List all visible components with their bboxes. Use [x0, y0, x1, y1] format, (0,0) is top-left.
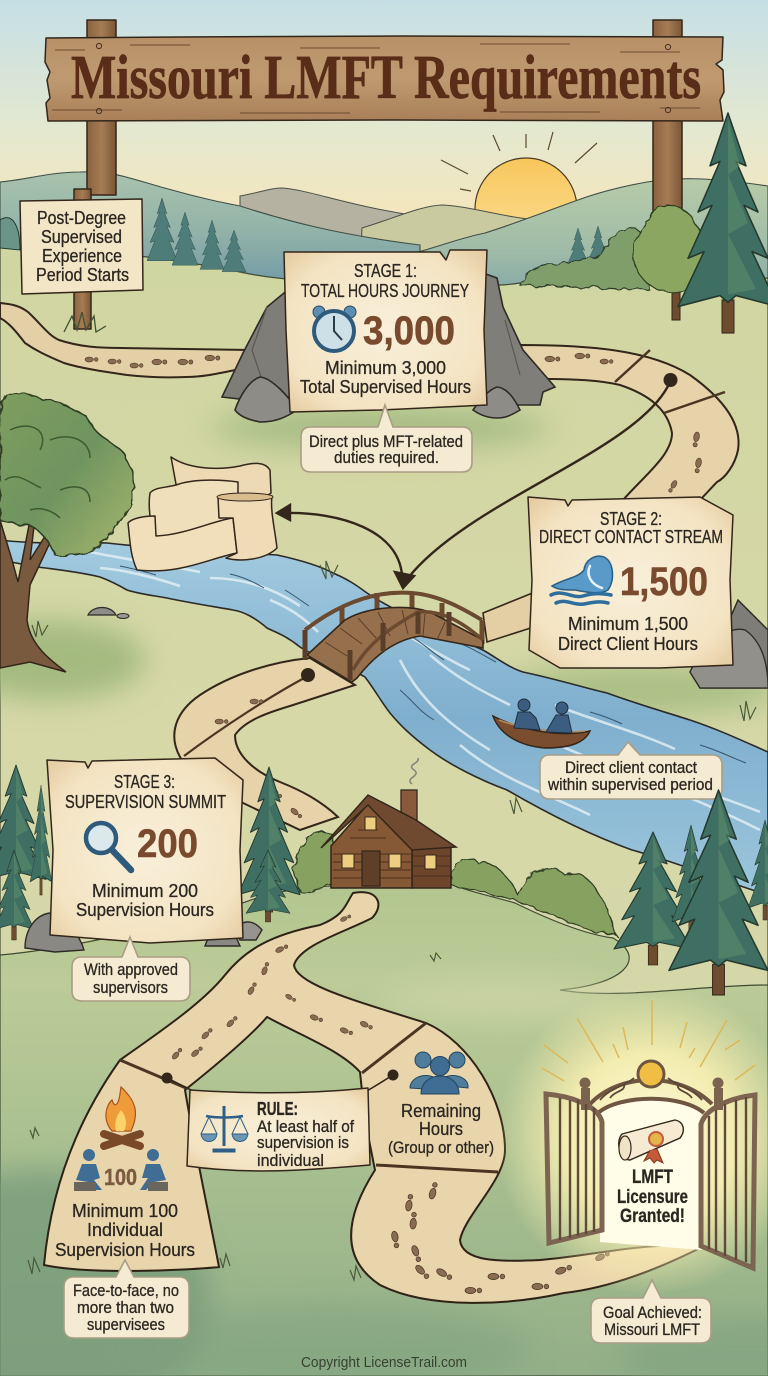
river	[0, 540, 768, 895]
start sign	[20, 199, 143, 294]
callout: stage 3 note: With approved	[84, 960, 178, 979]
panel: stage 2: Direct Client Hours	[558, 633, 698, 654]
icon: wave	[551, 556, 613, 604]
start sign: Experience	[42, 245, 122, 266]
left large tree	[0, 394, 134, 672]
large pine right	[678, 113, 768, 333]
text: remaining hours: Remaining	[401, 1100, 481, 1121]
arrow: stage 1 trail to bridge	[408, 373, 678, 578]
small rock near river	[88, 607, 129, 618]
text: individual hours: Supervision Hours	[55, 1239, 195, 1260]
right bushes and distant pines	[520, 226, 650, 290]
callout: face-to-face note: Face-to-face, no	[73, 1281, 179, 1300]
grass tufts	[28, 561, 756, 1280]
lower field on the hillside	[0, 884, 768, 1376]
panel: stage 3: Supervision Hours	[76, 899, 214, 920]
text: remaining hours: (Group or other)	[388, 1138, 494, 1157]
start sign: Post-Degree	[37, 207, 126, 228]
right post of the title sign	[653, 20, 682, 225]
callout: stage 1 note	[301, 405, 472, 472]
trail behind stage 2 to bridge	[483, 590, 540, 642]
callout: stage 2 note	[540, 742, 722, 799]
start sign: Period Starts	[36, 264, 129, 285]
distant pine trees left	[0, 198, 246, 272]
icon: seated people with 100: 100	[104, 1164, 137, 1190]
cabin	[321, 758, 456, 888]
stage 1 rocks	[222, 273, 555, 422]
panel: stage 1: Minimum 3,000	[325, 357, 446, 378]
banner: rule	[187, 1088, 370, 1171]
sun	[441, 132, 597, 260]
panel: stage 2: STAGE 2:	[600, 508, 662, 529]
background sky	[0, 0, 768, 300]
boat with two people	[493, 699, 590, 748]
panel: stage 1: Total Supervised Hours	[300, 376, 471, 397]
title sign board	[45, 36, 724, 121]
panel: stage 3: 200	[137, 822, 198, 866]
panel: stage 2	[528, 497, 768, 688]
text: remaining hours	[388, 1100, 494, 1157]
banner: rule: supervision is	[257, 1133, 349, 1152]
banner: rule: individual	[257, 1151, 324, 1170]
forked trail	[44, 892, 700, 1303]
text: individual hours	[55, 1200, 195, 1260]
icon: scales	[201, 1106, 248, 1152]
icon: campfire	[104, 1087, 140, 1146]
bridge	[305, 593, 483, 682]
text: individual hours: Minimum 100	[72, 1200, 178, 1221]
callout: stage 1 note: duties required.	[334, 448, 439, 467]
pines left of stage 3	[0, 765, 300, 940]
text: licensure granted: Licensure	[617, 1187, 688, 1208]
banner: rule: At least half of	[257, 1117, 354, 1136]
panel: stage 3: SUPERVISION SUMMIT	[65, 791, 226, 812]
gate with glow	[495, 985, 768, 1295]
left door	[546, 1094, 602, 1243]
arrow: bridge to scrolls	[277, 505, 414, 588]
callout: stage 2 note: within supervised period	[547, 775, 713, 794]
pines right of river	[614, 790, 768, 995]
callout: stage 3 note: supervisors	[93, 978, 168, 997]
callout: stage 3 note	[72, 937, 190, 1001]
text: individual hours: Individual	[87, 1219, 163, 1240]
panel: stage 1: STAGE 1:	[354, 260, 417, 281]
round tree right	[633, 205, 705, 320]
trail segment: stage 1 to stage 2	[520, 345, 739, 500]
text: licensure granted: Granted!	[620, 1206, 685, 1227]
distant hills	[0, 172, 768, 300]
stage 3 rocks	[25, 913, 262, 952]
icon: magnifier	[86, 823, 131, 870]
paper scrolls	[128, 457, 277, 571]
icon: alarm clock	[313, 306, 356, 351]
copyright: Copyright LicenseTrail.com	[301, 1354, 467, 1371]
callout: stage 2 note: Direct client contact	[565, 758, 697, 777]
panel: stage 3: STAGE 3:	[114, 771, 175, 792]
panel: stage 3: Minimum 200	[92, 880, 198, 901]
callout: goal achieved: Missouri LMFT	[604, 1320, 700, 1339]
panel: stage 1: TOTAL HOURS JOURNEY	[301, 280, 469, 301]
panel: stage 3	[47, 758, 243, 943]
text: licensure granted: LMFT	[632, 1167, 673, 1188]
panel: stage 2: 1,500	[620, 560, 708, 604]
panel: stage 1: 3,000	[363, 309, 455, 353]
start sign: Supervised	[41, 226, 122, 247]
callout: goal achieved: Goal Achieved:	[603, 1303, 702, 1322]
bushes beside cabin	[294, 832, 616, 935]
callout: goal achieved	[591, 1280, 711, 1343]
trail segment: start to stage 1	[0, 303, 250, 377]
callout: face-to-face note: more than two	[77, 1298, 174, 1317]
icon: group of people	[410, 1052, 468, 1094]
trail segment: bridge to stage 3	[174, 658, 355, 830]
icon: seated people with 100	[74, 1149, 168, 1191]
left signpost	[64, 20, 116, 332]
right door	[701, 1095, 755, 1268]
callout: face-to-face note: supervisees	[87, 1315, 165, 1334]
text: remaining hours: Hours	[419, 1118, 463, 1139]
callout: face-to-face note	[64, 1260, 189, 1338]
panel: stage 1	[284, 250, 487, 412]
ground shading blotches	[0, 406, 768, 1376]
panel: stage 2: Minimum 1,500	[568, 613, 688, 634]
callout: stage 1 note: Direct plus MFT-related	[309, 432, 463, 451]
text: licensure granted	[617, 1167, 688, 1227]
icon: diploma	[619, 1120, 683, 1163]
banner: rule: RULE:	[257, 1099, 298, 1119]
